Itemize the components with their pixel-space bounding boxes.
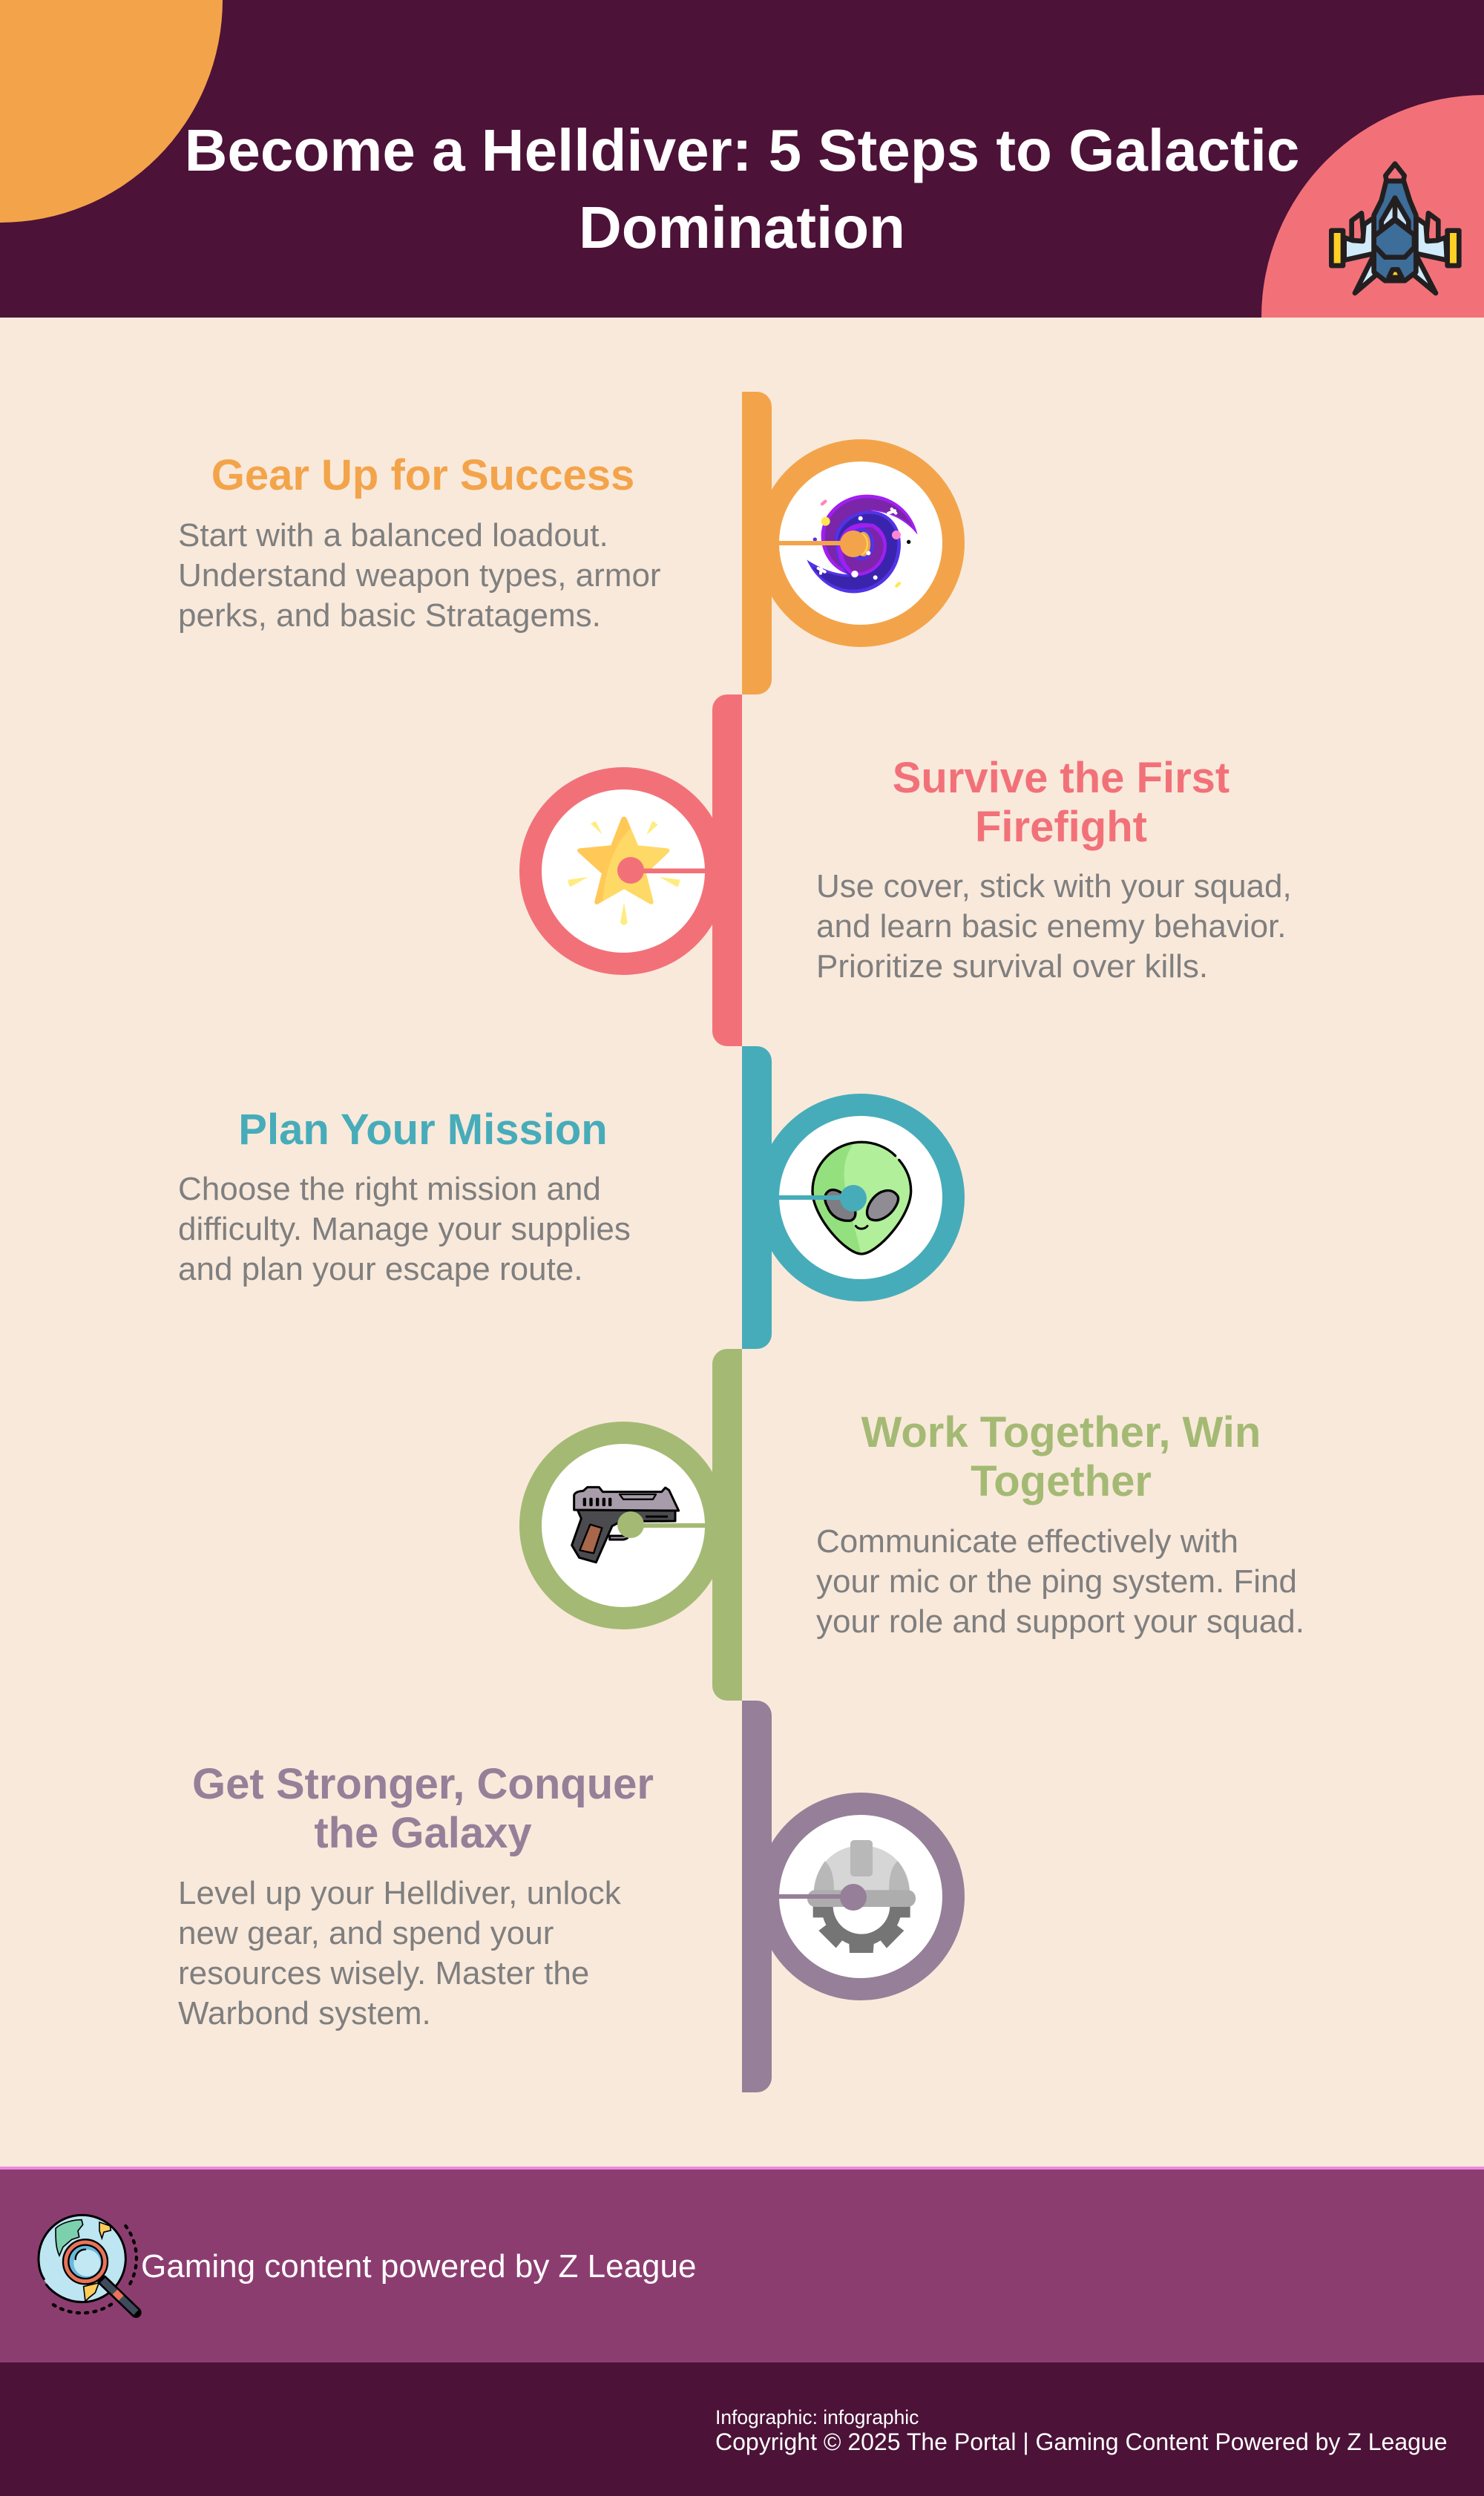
step 3 heading: Plan Your Mission bbox=[238, 1106, 608, 1154]
step 2 heading bbox=[893, 754, 1229, 851]
panel: step 1 gear up bbox=[178, 392, 953, 694]
panel: step 4 teamwork bbox=[531, 1349, 1304, 1701]
step 1 body: Understand weapon types, armor bbox=[178, 557, 661, 594]
title: Domination bbox=[579, 194, 905, 260]
step 2 body: Use cover, stick with your squad, bbox=[816, 868, 1292, 904]
decorative coral circle bbox=[1261, 95, 1484, 318]
step 4 circle bbox=[531, 1433, 716, 1618]
step 5 timeline bar bbox=[742, 1701, 772, 2092]
step 3 body: difficulty. Manage your supplies bbox=[178, 1211, 631, 1247]
panel: footer bbox=[0, 2362, 1484, 2496]
icon: galaxy bbox=[807, 495, 918, 593]
step 2 heading: Survive the First bbox=[893, 754, 1229, 802]
step 4 body: your mic or the ping system. Find bbox=[816, 1563, 1297, 1600]
panel: step 5 get stronger bbox=[178, 1701, 953, 2092]
step 1 body: Start with a balanced loadout. bbox=[178, 517, 608, 554]
panel: sponsor band bbox=[0, 2167, 1484, 2362]
step 2 body: and learn basic enemy behavior. bbox=[816, 908, 1287, 945]
step 5 body: resources wisely. Master the bbox=[178, 1955, 589, 1991]
title bbox=[185, 117, 1299, 260]
step 1 circle bbox=[768, 450, 953, 636]
sponsor text: Gaming content powered by Z League bbox=[141, 2248, 696, 2285]
step 2 circle bbox=[531, 778, 716, 964]
step 3 body: and plan your escape route. bbox=[178, 1251, 583, 1287]
icon: globe with magnifier bbox=[39, 2215, 137, 2313]
step 5 body: Warbond system. bbox=[178, 1995, 431, 2032]
decorative orange circle bbox=[0, 0, 223, 223]
step 5 body: new gear, and spend your bbox=[178, 1915, 554, 1951]
step 3 circle bbox=[768, 1105, 953, 1290]
step 1 heading: Gear Up for Success bbox=[211, 451, 634, 499]
step 2 body: Prioritize survival over kills. bbox=[816, 948, 1208, 985]
step 5 connector bbox=[779, 1884, 867, 1911]
step 2 heading: Firefight bbox=[975, 803, 1147, 851]
step 2 timeline bar bbox=[712, 694, 742, 1046]
step 5 heading bbox=[192, 1760, 654, 1857]
step 4 heading: Work Together, Win bbox=[861, 1408, 1261, 1456]
icon: pistol bbox=[572, 1487, 679, 1563]
icon: spaceship bbox=[1331, 164, 1459, 293]
step 5 heading: Get Stronger, Conquer bbox=[192, 1760, 654, 1808]
step 2 body bbox=[816, 868, 1292, 985]
icon: helmet and gear bbox=[807, 1840, 916, 1953]
icon: alien bbox=[812, 1142, 911, 1254]
step 3 connector bbox=[779, 1185, 867, 1212]
step 3 body bbox=[178, 1171, 631, 1287]
step 4 body bbox=[816, 1523, 1304, 1640]
step 4 heading bbox=[861, 1408, 1261, 1505]
footer label: Infographic: infographic bbox=[715, 2406, 919, 2428]
panel: step 2 survive bbox=[531, 694, 1292, 1046]
step 4 timeline bar bbox=[712, 1349, 742, 1701]
step 3 timeline bar bbox=[742, 1046, 772, 1349]
step 5 body bbox=[178, 1875, 622, 2032]
step 4 body: your role and support your squad. bbox=[816, 1603, 1304, 1640]
step 3 body: Choose the right mission and bbox=[178, 1171, 601, 1207]
panel: step 3 plan bbox=[178, 1046, 953, 1349]
step 1 body: perks, and basic Stratagems. bbox=[178, 597, 601, 634]
step 4 connector bbox=[617, 1511, 705, 1538]
icon: star bbox=[568, 817, 680, 925]
step 1 timeline bar bbox=[742, 392, 772, 694]
step 1 connector bbox=[779, 531, 867, 557]
copyright line: Copyright © 2025 The Portal | Gaming Content Powered by Z League bbox=[715, 2428, 1448, 2455]
step 1 body bbox=[178, 517, 661, 634]
step 5 heading: the Galaxy bbox=[314, 1809, 532, 1857]
step 2 connector bbox=[617, 857, 705, 884]
step 5 circle bbox=[768, 1804, 953, 1989]
step 5 body: Level up your Helldiver, unlock bbox=[178, 1875, 622, 1911]
panel: header bbox=[0, 0, 1484, 318]
step 4 body: Communicate effectively with bbox=[816, 1523, 1238, 1560]
step 4 heading: Together bbox=[971, 1457, 1152, 1505]
title: Become a Helldiver: 5 Steps to Galactic bbox=[185, 117, 1299, 183]
